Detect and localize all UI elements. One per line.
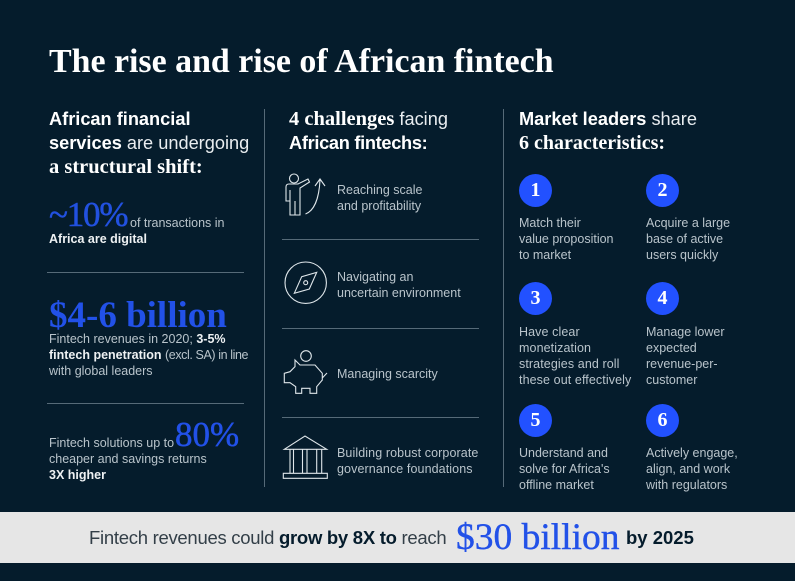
stat: 4-6 billion: $4-6 billion — [49, 295, 227, 336]
heading: characteristics — [519, 109, 697, 154]
text 5: offline market — [519, 478, 594, 492]
badge 5 — [519, 404, 552, 437]
badge 1: 1 — [530, 179, 540, 201]
text: reaching scale — [337, 183, 422, 213]
text 3: strategies and roll — [519, 357, 620, 371]
panel: structural shift — [49, 109, 249, 482]
text 1: to market — [519, 248, 571, 262]
text 1: value proposition — [519, 232, 614, 246]
badge 1 — [519, 174, 552, 207]
banner text end: by 2025 — [626, 527, 694, 548]
text 4: Manage lower — [646, 325, 725, 339]
text: building governance — [337, 446, 478, 476]
text: navigating — [337, 270, 461, 300]
heading: structural shift — [49, 109, 249, 178]
text: managing scarcity: Managing scarcity — [337, 367, 438, 381]
text: fintech revenues: Fintech revenues in 2020; 3-5% — [49, 332, 226, 346]
icon: compass — [284, 262, 327, 304]
text: transactions digital — [49, 216, 224, 246]
text: navigating: uncertain environment — [337, 286, 461, 300]
text 2 — [646, 216, 730, 262]
panel: challenges — [282, 108, 478, 479]
text 1: Match their — [519, 216, 581, 230]
text: fintech solutions: Fintech solutions up to — [49, 436, 174, 450]
badge 2 — [646, 174, 679, 207]
stat: 10 percent: ~10% — [49, 195, 127, 234]
text 5: Understand and — [519, 446, 608, 460]
badge 3: 3 — [530, 287, 540, 309]
heading: structural shift: a structural shift: — [49, 156, 203, 178]
heading: characteristics: Market leaders share — [519, 109, 697, 129]
heading: structural shift: African financial — [49, 109, 190, 129]
heading: challenges: 4 challenges facing — [289, 108, 448, 130]
text: reaching scale: Reaching scale — [337, 183, 422, 197]
icon: bank building — [282, 435, 328, 479]
icon: person and arrow — [285, 174, 326, 216]
bottom banner — [0, 512, 795, 563]
text 3: these out effectively — [519, 373, 631, 387]
text: building governance: Building robust corporate — [337, 446, 478, 460]
text 2: users quickly — [646, 248, 718, 262]
badge 2: 2 — [658, 179, 668, 201]
text: transactions digital: of transactions in — [130, 216, 224, 230]
text 4: expected — [646, 341, 697, 355]
text: transactions digital: Africa are digital — [49, 232, 147, 246]
badge 3 — [519, 282, 552, 315]
text 1 — [519, 216, 614, 262]
heading: challenges: African fintechs: — [289, 133, 427, 153]
text: fintech revenues: fintech penetration (excl. SA) in line — [49, 348, 248, 362]
heading: characteristics: 6 characteristics: — [519, 132, 665, 154]
text: fintech revenues: with global leaders — [49, 364, 153, 378]
badge 5: 5 — [530, 409, 540, 431]
text 3: Have clear — [519, 325, 580, 339]
text: reaching scale: and profitability — [337, 199, 421, 213]
text 4: customer — [646, 373, 697, 387]
heading: challenges — [289, 108, 448, 153]
text: fintech solutions: 3X higher — [49, 468, 106, 482]
icon: piggy bank — [284, 350, 328, 394]
panel: characteristics — [519, 109, 738, 492]
text 2: base of active — [646, 232, 723, 246]
text 5: solve for Africa's — [519, 462, 610, 476]
text 4: revenue-per- — [646, 357, 718, 371]
banner stat: $30 billion — [456, 517, 620, 558]
text: fintech solutions — [49, 436, 207, 482]
text 5 — [519, 446, 610, 492]
text 4 — [646, 325, 725, 387]
stat: 80 percent: 80% — [175, 415, 239, 454]
text 2: Acquire a large — [646, 216, 730, 230]
text 3: monetization — [519, 341, 591, 355]
badge 4 — [646, 282, 679, 315]
text: navigating: Navigating an — [337, 270, 413, 284]
text 6: align, and work — [646, 462, 730, 476]
badge 4: 4 — [658, 287, 668, 309]
badge 6 — [646, 404, 679, 437]
text 6: with regulators — [646, 478, 727, 492]
badge 6: 6 — [658, 409, 668, 431]
text: fintech solutions: cheaper and savings returns — [49, 452, 207, 466]
heading: structural shift: services are undergoing — [49, 133, 249, 153]
text: building governance: governance foundations — [337, 462, 473, 476]
banner text: Fintech revenues could grow by 8X to reach — [89, 527, 446, 548]
text 3 — [519, 325, 632, 387]
text: fintech revenues — [49, 332, 248, 378]
title: The rise and rise of African fintech — [49, 43, 554, 80]
text 6 — [646, 446, 738, 492]
text 6: Actively engage, — [646, 446, 738, 460]
